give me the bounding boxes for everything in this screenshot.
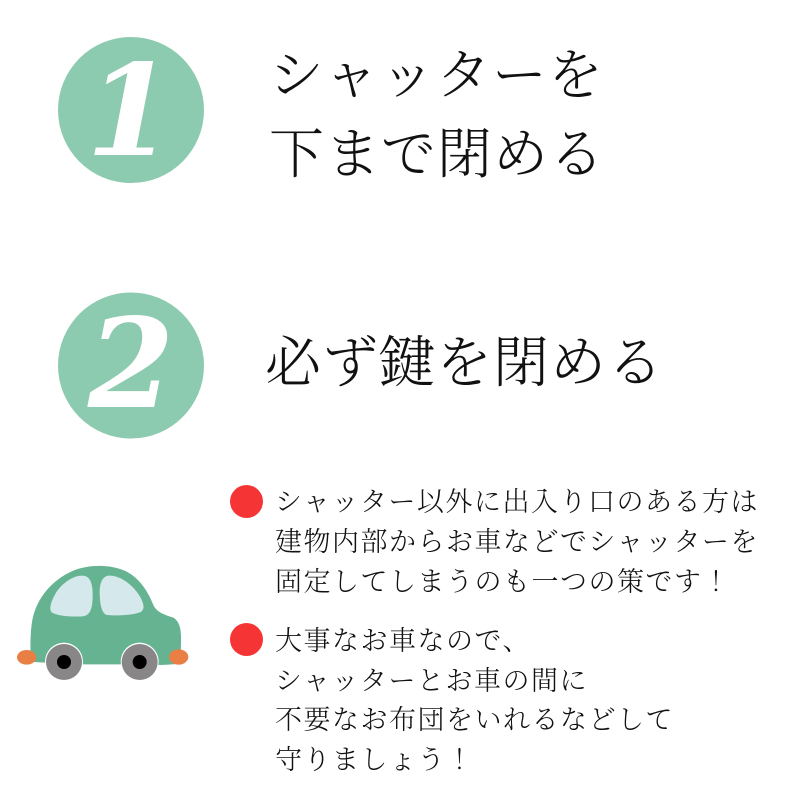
window: rear xyxy=(50,576,93,617)
note text 2 xyxy=(275,626,674,774)
front bumper light xyxy=(169,649,188,665)
note text 1: 建物内部からお車などでシャッターを xyxy=(275,527,759,557)
heading: step 2: 必ず鍵を閉める xyxy=(265,333,664,395)
badge: step 1: 1 xyxy=(86,37,174,185)
note text 2: 守りましょう！ xyxy=(275,744,474,774)
bullet: red dot 1 xyxy=(230,485,263,518)
front wheel xyxy=(121,643,159,681)
note text 2: シャッターとお車の間に xyxy=(275,666,588,696)
bullet: red dot 2 xyxy=(230,623,263,656)
badge: step 2: 2 xyxy=(87,292,174,437)
badge: step 2 xyxy=(58,292,204,438)
heading: step 1 xyxy=(269,45,605,185)
note text 1 xyxy=(275,487,759,597)
window: front xyxy=(100,576,144,615)
note text 2: 不要なお布団をいれるなどして xyxy=(275,705,674,735)
heading: step 1: 下まで閉める xyxy=(269,124,605,185)
note text 2: 大事なお車なので、 xyxy=(275,626,531,656)
heading: step 1: シャッターを xyxy=(269,45,604,106)
rear bumper light xyxy=(17,650,36,665)
note text 1: 固定してしまうのも一つの策です！ xyxy=(275,567,731,597)
badge: step 1 xyxy=(58,37,204,185)
car body xyxy=(30,566,181,665)
note text 1: シャッター以外に出入り口のある方は xyxy=(275,487,759,517)
rear wheel xyxy=(45,643,83,681)
